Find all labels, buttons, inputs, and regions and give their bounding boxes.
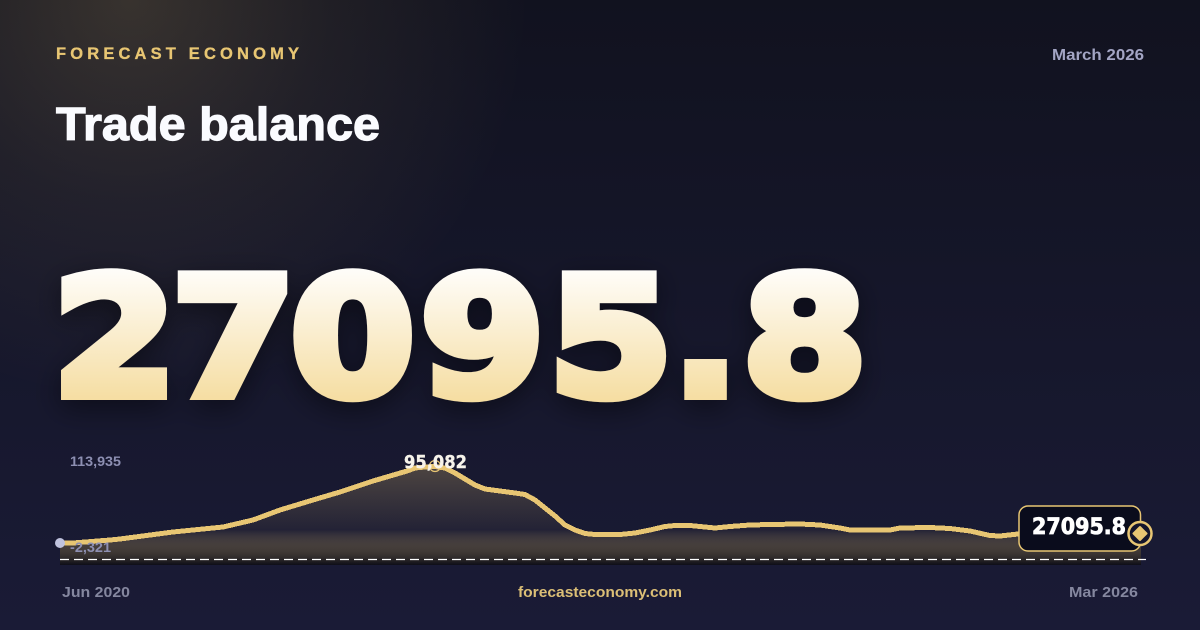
y-axis max label: 113,935 (70, 454, 122, 469)
y-axis min label: -2,321 (70, 540, 112, 555)
date label: March 2026 (1052, 47, 1144, 64)
eyebrow: brand name: FORECAST ECONOMY (56, 45, 299, 63)
current value callout: 27095.8 (1032, 515, 1126, 540)
chart: trade balance line (55, 452, 1152, 565)
current value callout (1019, 506, 1140, 551)
current point marker (1128, 522, 1152, 545)
title: Trade balance (56, 98, 380, 150)
zero baseline (60, 558, 1146, 560)
x-axis end label: Mar 2026 (1069, 584, 1138, 601)
start point (55, 538, 65, 548)
headline value: 27095.8 (52, 242, 867, 434)
peak marker (430, 460, 440, 472)
source link: forecasteconomy.com (518, 584, 682, 601)
chart area fill (60, 466, 1141, 565)
x-axis start label: Jun 2020 (62, 584, 130, 601)
peak value: 95,082 (404, 452, 467, 473)
data line (60, 466, 1140, 543)
